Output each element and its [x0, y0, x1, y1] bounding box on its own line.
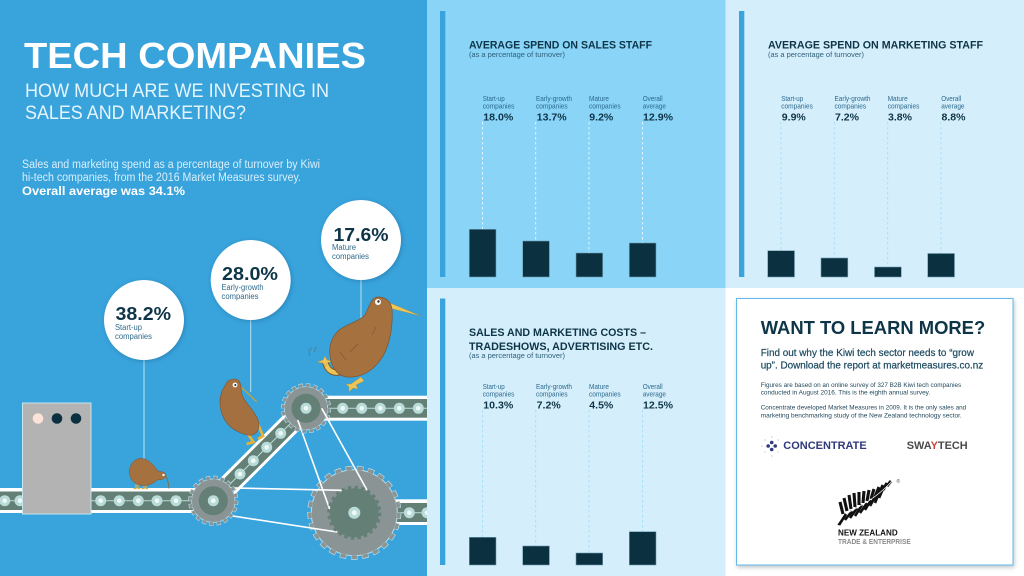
subtitle: HOW MUCH ARE WE INVESTING IN	[25, 80, 329, 102]
column: overall: 12.9%	[643, 112, 674, 124]
conveyor: inclined belt	[213, 408, 306, 501]
column: start-up: 18.0%	[483, 112, 514, 124]
survey notes: Figures are based on an online survey of 327 B2B Kiwi tech companies	[761, 382, 962, 389]
column: mature: 9.2%	[589, 112, 614, 124]
title: TECH COMPANIES	[24, 35, 366, 76]
heading: AVERAGE SPEND ON SALES STAFF	[469, 40, 652, 52]
callout: mature 17.6%: companies	[332, 252, 369, 261]
column: start-up: Start-up	[781, 94, 803, 103]
logo: New Zealand Trade and Enterprise	[838, 478, 911, 546]
column: mature: companies	[888, 102, 920, 110]
column: early-growth: 7.2%	[537, 400, 561, 412]
column: overall: average	[643, 102, 666, 110]
column: early-growth: companies	[536, 390, 568, 398]
icon: large kiwi	[309, 297, 421, 392]
column: overall: average	[643, 390, 666, 398]
heading	[469, 327, 653, 353]
logo: Concentrate: CONCENTRATE	[783, 440, 867, 452]
intro text: Overall average was 34.1%	[22, 184, 185, 198]
column: early-growth	[523, 94, 572, 277]
callout: mature 17.6%: Mature	[332, 243, 357, 252]
column: early-growth: 13.7%	[537, 112, 567, 124]
column: overall	[928, 94, 966, 277]
panel: average spend on marketing staff	[726, 0, 1024, 288]
column: mature: Mature	[589, 94, 609, 103]
icon: small kiwi	[129, 458, 169, 488]
callout: mature 17.6%	[321, 200, 401, 280]
column: overall: average	[941, 102, 964, 110]
subheading: (as a percentage of turnover)	[469, 52, 565, 59]
callout: start-up 38.2%: Start-up	[115, 323, 143, 332]
dashed guide lines	[781, 122, 941, 267]
conveyor: lower right belt	[354, 499, 432, 525]
callout: mature 17.6%: 17.6%	[334, 225, 388, 245]
gear: lower left	[190, 478, 236, 524]
panel: average spend on sales staff	[427, 0, 726, 288]
column: start-up: companies	[483, 102, 515, 110]
column: mature: 3.8%	[888, 112, 913, 124]
panel: sales and marketing costs	[427, 288, 726, 576]
subheading: (as a percentage of turnover)	[469, 353, 565, 360]
conveyor: upper right belt	[306, 396, 427, 421]
column: start-up: companies	[781, 102, 813, 110]
logo: New Zealand Trade and Enterprise: ®	[896, 478, 900, 485]
column: mature: 4.5%	[589, 400, 614, 412]
column: early-growth: Early-growth	[536, 382, 572, 391]
column: start-up	[469, 382, 515, 565]
gear: upper	[283, 385, 330, 431]
column: mature	[576, 94, 621, 277]
column: mature: Mature	[888, 94, 908, 103]
column: mature: Mature	[589, 382, 609, 391]
intro text: Sales and marketing spend as a percentage of turnover by Kiwi	[22, 159, 320, 171]
column: overall: Overall	[643, 94, 663, 103]
intro text: hi-tech companies, from the 2016 Market Measures survey.	[22, 172, 301, 184]
survey notes: conducted in August 2016. This is the eighth annual survey.	[761, 390, 930, 397]
column: early-growth	[523, 382, 572, 565]
column: start-up: Start-up	[483, 382, 505, 391]
column: mature	[874, 94, 920, 277]
column: mature	[576, 382, 621, 565]
column: early-growth: Early-growth	[834, 94, 870, 103]
gear: large	[310, 468, 399, 557]
column: early-growth: 7.2%	[835, 112, 860, 124]
column: overall: 12.5%	[643, 400, 674, 412]
column: start-up: 9.9%	[782, 112, 806, 124]
column: early-growth	[821, 94, 870, 277]
logo: New Zealand Trade and Enterprise: TRADE & ENTERPRISE	[838, 539, 911, 546]
survey notes	[761, 382, 967, 420]
logo: Swaytech: SWAYTECH	[907, 440, 968, 452]
heading: WANT TO LEARN MORE?	[761, 317, 985, 338]
column: mature: companies	[589, 390, 621, 398]
dashed guide lines	[482, 122, 642, 253]
intro text	[22, 159, 320, 198]
callout: early-growth 28.0%	[211, 240, 291, 320]
dashed guide lines	[482, 410, 642, 553]
column: start-up	[768, 94, 813, 277]
column: start-up: companies	[483, 390, 515, 398]
icon: medium kiwi	[220, 379, 263, 444]
callout: start-up 38.2%	[104, 280, 184, 360]
column: early-growth: companies	[536, 102, 568, 110]
heading: AVERAGE SPEND ON MARKETING STAFF	[768, 40, 983, 52]
callout: early-growth 28.0%: 28.0%	[222, 264, 278, 284]
column: early-growth: Early-growth	[536, 94, 572, 103]
call to action text: Find out why the Kiwi tech sector needs to “grow	[761, 347, 974, 359]
callout: early-growth 28.0%: Early-growth	[222, 283, 264, 292]
column: start-up: 10.3%	[483, 400, 514, 412]
callout: start-up 38.2%: 38.2%	[116, 304, 171, 324]
gear drive belts	[220, 408, 367, 532]
column: overall: Overall	[643, 382, 663, 391]
column: start-up: Start-up	[483, 94, 505, 103]
callout leader lines	[144, 280, 361, 459]
call to action text	[761, 347, 983, 372]
call to action text: up”. Download the report at marketmeasures.co.nz	[761, 360, 983, 372]
panel: want to learn more	[736, 298, 1013, 565]
panel: intro and conveyor illustration	[0, 0, 432, 576]
machine box	[22, 403, 91, 514]
icon: silver fern	[838, 480, 893, 525]
column: overall: 8.8%	[942, 112, 966, 124]
conveyor: lower left belt	[0, 488, 214, 513]
column: early-growth: companies	[834, 102, 866, 110]
callout: early-growth 28.0%: companies	[222, 292, 258, 301]
column: overall	[629, 382, 674, 565]
heading: TRADESHOWS, ADVERTISING ETC.	[469, 341, 653, 353]
gear: large inner cog	[329, 487, 380, 538]
heading: SALES AND MARKETING COSTS –	[469, 327, 646, 339]
column: overall	[629, 94, 674, 277]
survey notes: Concentrate developed Market Measures in 2009. It is the only sales and	[761, 405, 967, 412]
logo: New Zealand Trade and Enterprise: NEW ZEALAND	[838, 528, 898, 538]
column: start-up	[469, 94, 515, 277]
survey notes: marketing benchmarking study of the New Zealand technology sector.	[761, 412, 962, 420]
subheading: (as a percentage of turnover)	[768, 52, 864, 59]
column: overall: Overall	[941, 94, 961, 103]
callout: start-up 38.2%: companies	[115, 332, 152, 341]
subtitle	[25, 80, 329, 124]
logo: Concentrate	[761, 436, 867, 457]
column: mature: companies	[589, 102, 621, 110]
subtitle: SALES AND MARKETING?	[25, 102, 246, 124]
